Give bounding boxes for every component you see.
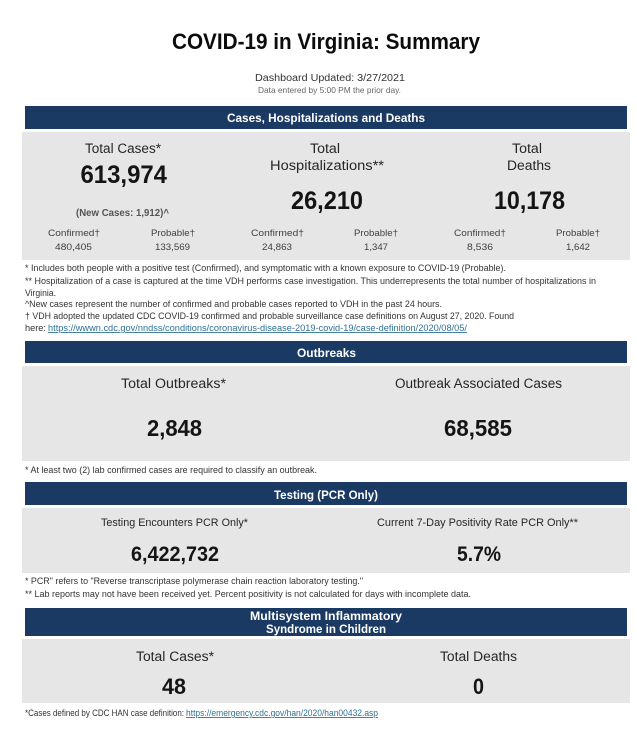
section: multisystem inflammatory syndrome in children bbox=[22, 608, 630, 718]
total cases metric: Total Cases* bbox=[85, 141, 162, 156]
total cases metric: 480,405 bbox=[55, 242, 92, 253]
section: outbreaks bbox=[22, 341, 630, 475]
data entry note: Data entered by 5:00 PM the prior day. bbox=[258, 86, 401, 95]
MIS-C total cases metric bbox=[136, 649, 215, 699]
footnotes: cases: ^New cases represent the number of confirmed and probable cases reported to VDH in the past 24 hours. bbox=[25, 299, 442, 309]
panel: outbreak totals bbox=[22, 366, 630, 461]
testing encounters metric bbox=[101, 517, 249, 566]
total deaths metric: 1,642 bbox=[566, 242, 590, 253]
total hospitalizations metric: Confirmed† bbox=[251, 228, 304, 239]
footnote: outbreaks: * At least two (2) lab confirmed cases are required to classify an outbreak. bbox=[25, 465, 317, 475]
footnotes: testing bbox=[25, 576, 471, 599]
footnotes: cases: ** Hospitalization of a case is captured at the time VDH performs case investigation. This underrepresents the total number of hospitalizations in bbox=[25, 276, 596, 286]
banner: testing: Testing (PCR Only) bbox=[274, 488, 378, 502]
total cases metric: Probable† bbox=[151, 228, 195, 239]
panel: case totals bbox=[22, 132, 630, 260]
testing encounters metric: Testing Encounters PCR Only* bbox=[101, 517, 249, 529]
positivity rate metric: 5.7% bbox=[457, 543, 501, 566]
total hospitalizations metric: Probable† bbox=[354, 228, 398, 239]
total deaths metric: 8,536 bbox=[467, 242, 493, 253]
outbreak associated cases metric: Outbreak Associated Cases bbox=[395, 376, 562, 391]
total outbreaks metric bbox=[121, 376, 227, 441]
total deaths metric: Confirmed† bbox=[454, 228, 506, 239]
panel: MIS-C totals bbox=[22, 639, 630, 703]
testing encounters metric: 6,422,732 bbox=[131, 543, 219, 566]
outbreak associated cases metric: 68,585 bbox=[444, 415, 512, 441]
banner: outbreaks bbox=[25, 341, 627, 363]
banner: cases, hospitalizations and deaths: Cases, Hospitalizations and Deaths bbox=[227, 111, 425, 125]
MIS-C total deaths metric: Total Deaths bbox=[440, 649, 517, 664]
banner: outbreaks: Outbreaks bbox=[297, 346, 356, 360]
footnotes: cases: here: bbox=[25, 323, 46, 333]
total deaths metric: Deaths bbox=[507, 158, 551, 173]
total outbreaks metric: Total Outbreaks* bbox=[121, 376, 227, 391]
section: testing bbox=[22, 482, 630, 599]
dashboard updated date: Dashboard Updated: 3/27/2021 bbox=[255, 73, 405, 84]
total hospitalizations metric: 1,347 bbox=[364, 242, 388, 253]
total hospitalizations metric bbox=[251, 141, 398, 253]
total outbreaks metric: 2,848 bbox=[147, 415, 202, 441]
total cases metric: (New Cases: 1,912)^ bbox=[76, 208, 169, 219]
footnote: MIS-C definition: https://emergency.cdc.gov/han/2020/han00432.asp bbox=[186, 708, 378, 718]
positivity rate metric bbox=[377, 517, 579, 566]
total deaths metric: Total bbox=[512, 141, 542, 156]
panel: testing totals bbox=[22, 508, 630, 573]
footnotes: cases: Virginia. bbox=[25, 288, 56, 298]
banner: testing bbox=[25, 482, 627, 505]
total deaths metric: 10,178 bbox=[494, 187, 565, 215]
outbreak associated cases metric bbox=[395, 376, 562, 441]
total cases metric: 133,569 bbox=[155, 242, 190, 253]
banner: multisystem inflammatory syndrome in children bbox=[25, 608, 627, 636]
section: cases, hospitalizations and deaths bbox=[22, 106, 630, 333]
title: COVID-19 in Virginia: Summary bbox=[172, 29, 481, 54]
footnotes: testing: ** Lab reports may not have been received yet. Percent positivity is not calculated for days with incomplete data. bbox=[25, 589, 471, 599]
total hospitalizations metric: 24,863 bbox=[262, 242, 292, 253]
MIS-C total deaths metric bbox=[440, 649, 517, 699]
footnote: MIS-C definition bbox=[25, 708, 378, 718]
total hospitalizations metric: Hospitalizations** bbox=[270, 158, 385, 173]
total cases metric: 613,974 bbox=[80, 161, 167, 189]
MIS-C total deaths metric: 0 bbox=[473, 674, 484, 699]
total hospitalizations metric: Total bbox=[310, 141, 340, 156]
footnotes: cases: † VDH adopted the updated CDC COVID-19 confirmed and probable surveillance case definitions on August 27, 2020. Found bbox=[25, 311, 514, 321]
banner: multisystem inflammatory syndrome in children: Syndrome in Children bbox=[266, 622, 386, 636]
banner: cases, hospitalizations and deaths bbox=[25, 106, 627, 129]
MIS-C total cases metric: Total Cases* bbox=[136, 649, 215, 664]
total deaths metric: Probable† bbox=[556, 228, 600, 239]
MIS-C total cases metric: 48 bbox=[162, 674, 186, 699]
footnotes: testing: * PCR" refers to "Reverse transcriptase polymerase chain reaction laboratory testing." bbox=[25, 576, 363, 586]
banner: multisystem inflammatory syndrome in children: Multisystem Inflammatory bbox=[250, 609, 402, 623]
total cases metric: Confirmed† bbox=[48, 228, 100, 239]
total hospitalizations metric: 26,210 bbox=[291, 187, 363, 215]
footnotes: cases: https://wwwn.cdc.gov/nndss/conditions/coronavirus-disease-2019-covid-19/case-definition/2020/08/05/ bbox=[48, 323, 468, 333]
footnotes: cases bbox=[25, 263, 596, 333]
total deaths metric bbox=[454, 141, 600, 253]
footnote: MIS-C definition: *Cases defined by CDC HAN case definition: bbox=[25, 708, 184, 718]
total cases metric bbox=[48, 141, 195, 253]
positivity rate metric: Current 7-Day Positivity Rate PCR Only** bbox=[377, 517, 579, 529]
footnotes: cases: * Includes both people with a positive test (Confirmed), and symptomatic with a known exposure to COVID-19 (Probable). bbox=[25, 263, 506, 273]
